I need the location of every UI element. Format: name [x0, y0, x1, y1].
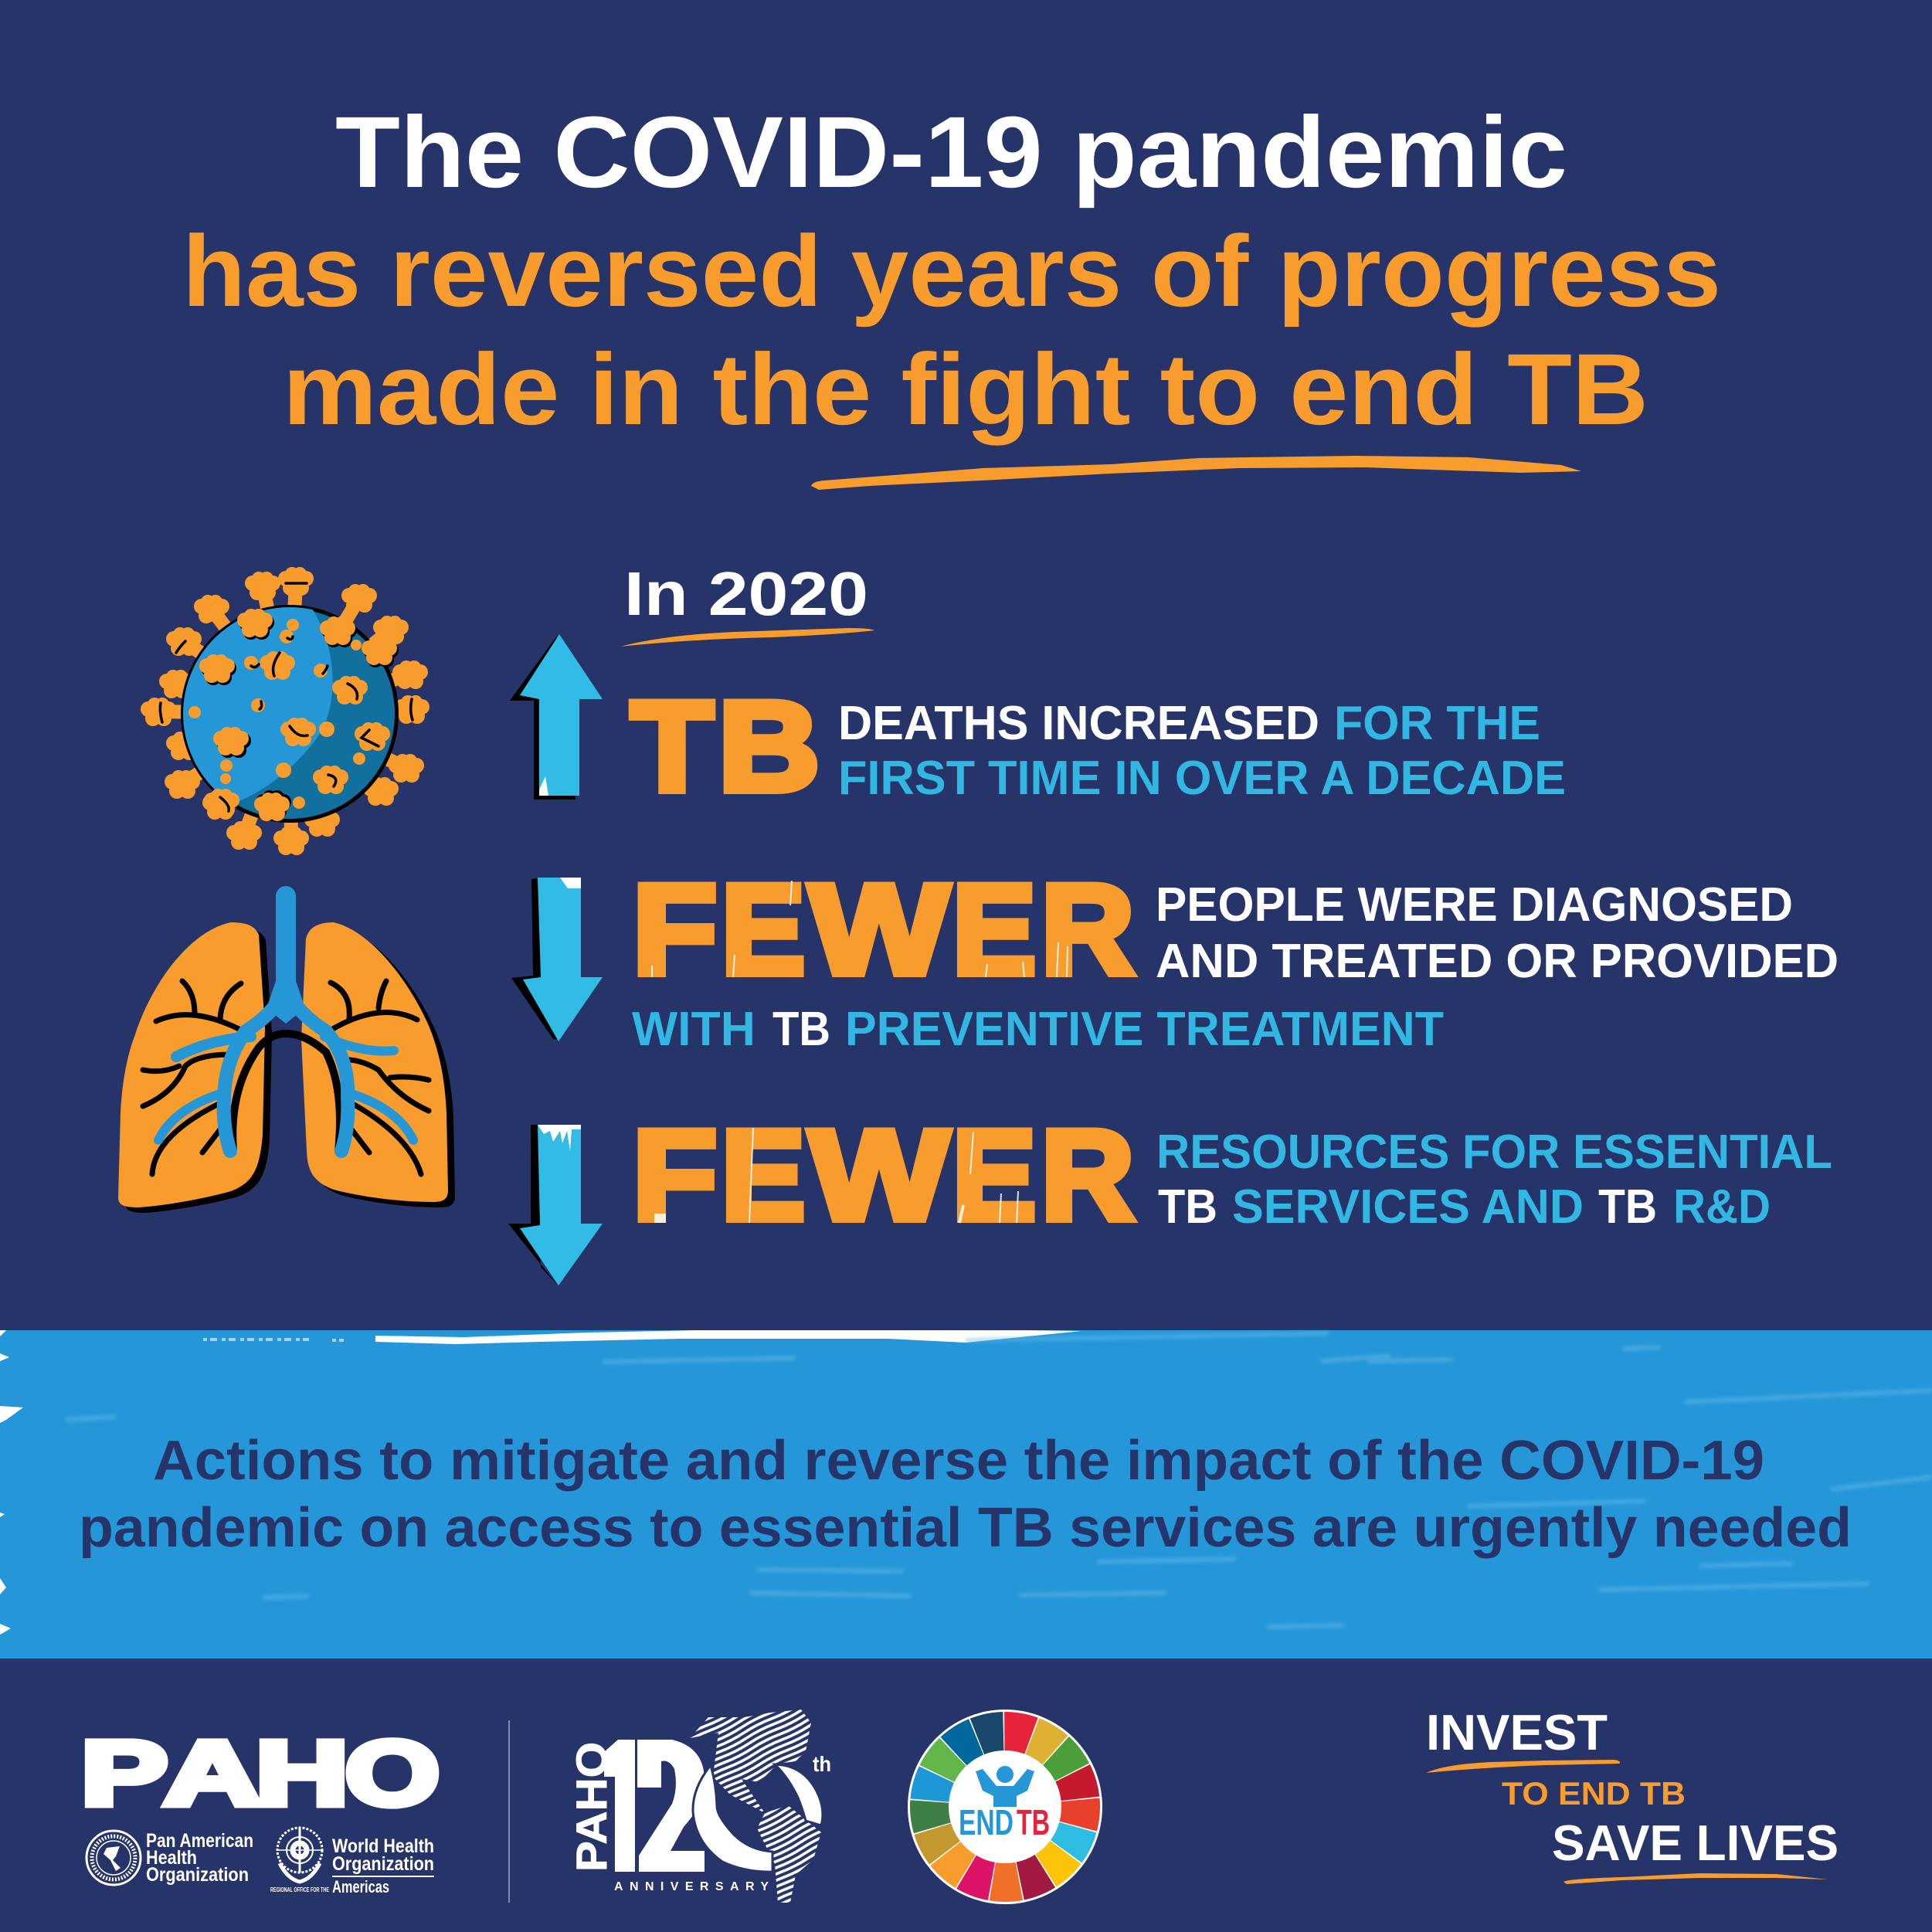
band brush highlights — [0, 1330, 1081, 1635]
health: Health — [146, 1847, 197, 1869]
and treated or provided: AND TREATED OR PROVIDED — [1156, 935, 1839, 988]
slogan: invest to end TB save lives — [1426, 1704, 1839, 1884]
WHO emblem — [277, 1828, 322, 1882]
virus black accents — [160, 583, 413, 811]
arrow down: resources — [508, 1125, 603, 1285]
numeral 1 and 2 — [604, 1740, 705, 1872]
map of the Americas — [690, 1710, 821, 1903]
heading underline — [620, 628, 874, 647]
band paint streaks — [66, 1333, 1932, 1627]
PAHO wordmark: H — [256, 1723, 348, 1825]
people were diagnosed: PEOPLE WERE DIAGNOSED — [1156, 878, 1793, 932]
lung left — [118, 922, 265, 1207]
R&D: R&D — [1673, 1180, 1771, 1234]
virus spikes — [141, 567, 430, 855]
trachea flare — [267, 981, 305, 1024]
lung shadows — [125, 928, 455, 1213]
TB: TB — [772, 1003, 830, 1056]
th: th — [813, 1752, 831, 1776]
trachea and bronchi — [158, 896, 413, 1151]
row 2: FEWER big word: F — [633, 858, 717, 1000]
organization: Organization — [332, 1853, 434, 1875]
row 1 text — [838, 697, 1566, 805]
title line 1: The COVID-19 pandemic — [335, 95, 1567, 209]
row 2: FEWER big word: R — [1041, 858, 1134, 1000]
anniversary: ANNIVERSARY — [614, 1880, 769, 1893]
row 1: TB big word: T — [631, 675, 713, 817]
world health: World Health — [332, 1835, 434, 1857]
END label: END — [959, 1802, 1014, 1842]
deaths increased: DEATHS INCREASED — [838, 697, 1319, 750]
band line 1: Actions to mitigate and reverse the impact of the COVID-19 — [153, 1430, 1764, 1492]
title line 2: has reversed years of progress — [182, 214, 1721, 328]
row 3 paint flecks — [654, 1128, 1018, 1223]
preventive treatment: PREVENTIVE TREATMENT — [845, 1003, 1444, 1056]
logo: PAHO 120th anniversary — [567, 1710, 831, 1903]
footer divider — [508, 1720, 510, 1903]
virus surface blobs — [188, 609, 397, 821]
TB: TB — [1158, 1180, 1217, 1234]
band line 2: pandemic on access to essential TB services are urgently needed — [79, 1497, 1852, 1559]
PAHO name — [146, 1830, 253, 1886]
americas: Americas — [332, 1877, 389, 1896]
save lives: SAVE LIVES — [1552, 1815, 1839, 1871]
row 3: FEWER big word: E — [952, 1104, 1036, 1246]
title underline brush stroke — [811, 456, 1581, 490]
icon: coronavirus — [141, 567, 430, 855]
virus sphere — [181, 605, 399, 823]
numeral 0 — [693, 1764, 823, 1872]
row 2: FEWER big word: E — [722, 858, 805, 1000]
PAHO wordmark: A — [164, 1723, 261, 1825]
lung right — [301, 922, 448, 1202]
band ragged speckles — [203, 1339, 344, 1340]
row 3: FEWER big word: E — [722, 1104, 805, 1246]
invest underline — [1426, 1760, 1620, 1773]
panel: call to action band — [0, 1330, 1932, 1659]
pan american: Pan American — [146, 1830, 253, 1852]
row 2 text — [632, 878, 1839, 1056]
with: WITH — [632, 1003, 755, 1056]
arrow down: diagnosed — [511, 878, 603, 1041]
title line 3: made in the fight to end TB — [283, 332, 1648, 446]
row 2 paint flecks — [652, 881, 1068, 977]
for the: FOR THE — [1334, 697, 1540, 750]
row 2: FEWER big word: W — [810, 858, 949, 1000]
organization: Organization — [146, 1864, 249, 1886]
logo: End TB SDG wheel — [908, 1710, 1102, 1904]
resources for essential: RESOURCES FOR ESSENTIAL — [1156, 1126, 1832, 1179]
WHO name — [270, 1835, 434, 1896]
PAHO wordmark: P — [81, 1723, 168, 1825]
arrow up: deaths — [510, 634, 603, 800]
PAHO emblem — [87, 1831, 141, 1885]
PAHO wordmark: O — [345, 1723, 440, 1825]
title — [182, 95, 1721, 446]
row 2: FEWER big word: E — [952, 858, 1036, 1000]
logo: PAHO WHO — [81, 1723, 440, 1896]
row 3: FEWER big word: F — [633, 1104, 717, 1246]
wheel segments — [929, 1731, 1081, 1883]
invest: INVEST — [1426, 1704, 1608, 1761]
services and: SERVICES AND — [1232, 1180, 1584, 1234]
first time in over a decade: FIRST TIME IN OVER A DECADE — [838, 752, 1566, 805]
to end TB: TO END TB — [1502, 1775, 1686, 1811]
TB label: TB — [1017, 1802, 1050, 1842]
row 3 text — [1156, 1126, 1832, 1234]
PAHO vertical label: PAHO — [567, 1742, 616, 1872]
icon: lungs — [118, 896, 455, 1213]
virus surface blob shadows — [201, 611, 399, 819]
heading: In 2020: In 2020 — [624, 559, 868, 628]
regional office: REGIONAL OFFICE FOR THE — [270, 1886, 329, 1893]
row 3: FEWER big word: R — [1041, 1104, 1134, 1246]
icon: person with raised arms — [976, 1766, 1034, 1807]
lung airways black veins — [143, 981, 429, 1174]
row 3: FEWER big word: W — [810, 1104, 949, 1246]
TB: TB — [1598, 1180, 1657, 1234]
save lives underline — [1564, 1873, 1828, 1884]
row 1: TB big word: B — [718, 675, 820, 817]
band text — [79, 1430, 1852, 1559]
lung arch black shadow — [233, 1034, 340, 1151]
